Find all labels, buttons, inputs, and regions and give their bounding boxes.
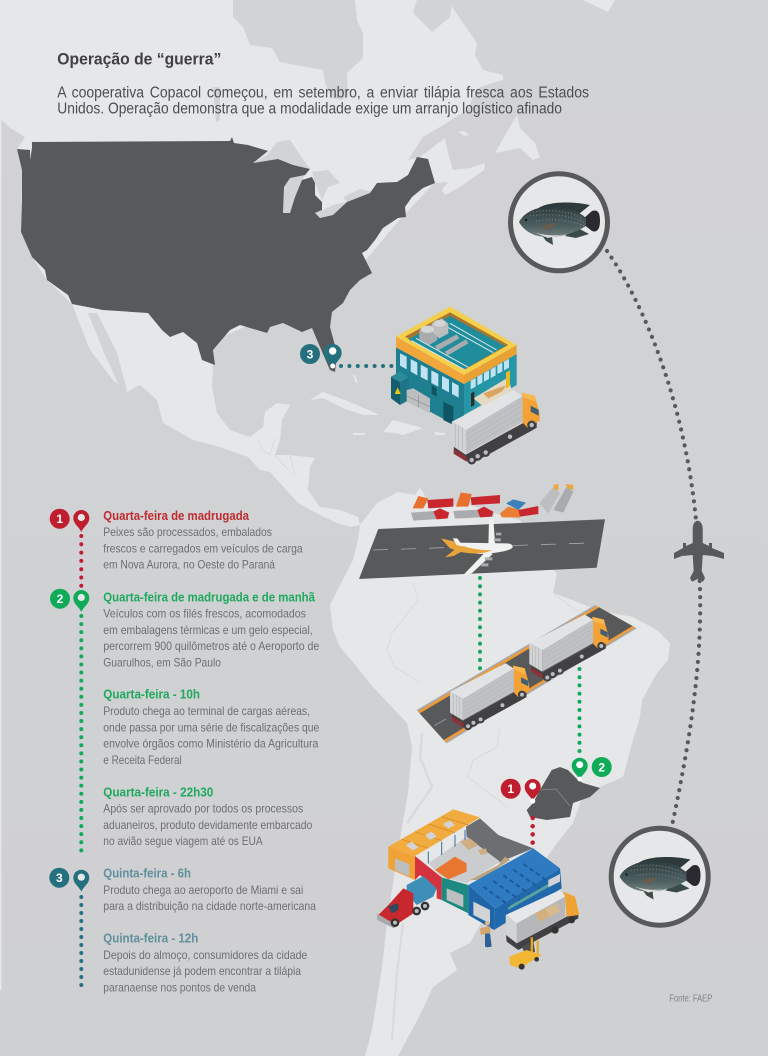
step: Quinta-feira 6h [103,866,316,913]
dotted flight path [607,251,700,822]
step: Quinta-feira 12h: estadunidense já podem encontrar a tilápia [103,964,301,978]
Newfoundland and islands [310,0,615,435]
intro text [57,84,589,117]
step: Quinta-feira 12h: Depois do almoço, consumidores da cidade [103,948,308,962]
timeline marker 2: 2 [57,592,64,606]
rivers and borders [258,438,590,1040]
step: Quinta-feira 12h: paranaense nos pontos de venda [103,980,256,994]
step: Quarta-feira 22h30: aduaneiros, produto devidamente embarcado [103,818,313,832]
timeline marker 3 [49,868,89,892]
marker 3 on the map [300,344,393,369]
source credit: Fonte: FAEP [669,994,713,1005]
red dotted route [530,818,535,843]
title: Operação de “guerra” [57,49,221,68]
step: Quinta-feira 12h [103,931,308,994]
step: Quarta-feira de madrugada: em Nova Aurora, no Oeste do Paraná [103,557,275,571]
step: Quarta-feira 22h30 [103,785,313,848]
step: Quarta-feira 22h30: no avião segue viagem até os EUA [103,834,263,848]
step: Quarta-feira 10h: Quarta-feira - 10h [103,687,200,702]
lakes and seas [88,0,452,392]
parked vehicles above runway [411,484,573,521]
step: Quarta-feira de madrugada e de manhã: em embalagens térmicas e um gelo especial, [103,623,313,637]
step: Quarta-feira 22h30: Após ser aprovado por todos os processos [103,802,303,816]
building with truck (Miami) [391,307,540,464]
step: Quarta-feira 22h30: Quarta-feira - 22h30 [103,785,213,800]
timeline dots red [79,536,83,587]
runway [359,519,605,579]
green dotted routes [480,578,580,751]
step: Quarta-feira 10h: Produto chega ao terminal de cargas aéreas, [103,704,310,718]
step: Quarta-feira de madrugada: Quarta-feira de madrugada [103,508,250,523]
step: Quinta-feira 12h: Quinta-feira - 12h [103,931,198,946]
warehouse with trucks and forklift [377,809,579,970]
step: Quarta-feira de madrugada [103,508,303,571]
step: Quarta-feira 10h: envolve órgãos como Ministério da Agricultura [103,737,319,751]
marker 2 on the map [572,757,612,781]
step: Quarta-feira de madrugada e de manhã [103,589,320,669]
timeline dots teal [79,897,83,993]
icon: tilapia bottom [611,828,708,925]
timeline marker 1 [50,509,89,532]
step: Quarta-feira 10h: onde passa por uma série de fiscalizações que [103,721,320,735]
step: Quarta-feira de madrugada e de manhã: Quarta-feira de madrugada e de manhã [103,589,316,604]
step: Quarta-feira 10h: e Receita Federal [103,753,182,767]
step: Quinta-feira 6h: para a distribuição na cidade norte-americana [103,899,316,913]
map: United States [17,137,435,372]
step: Quarta-feira de madrugada e de manhã: percorrem 900 quilômetros até o Aeroporto de [103,639,320,653]
step: Quinta-feira 6h: Quinta-feira - 6h [103,866,191,881]
step: Quarta-feira de madrugada: Peixes são processados, embalados [103,525,272,539]
marker 2 on the map: 2 [598,760,605,774]
timeline dots green [79,616,83,858]
worker carrying box [480,921,492,947]
forklift [509,937,542,970]
airplane on runway [441,519,513,575]
icon: tilapia top [510,174,608,271]
step: Quarta-feira de madrugada e de manhã: Veículos com os filés frescos, acomodados [103,606,306,620]
marker 3 on the map: 3 [307,348,314,362]
map: Paraná state [527,767,600,820]
step: Quarta-feira de madrugada e de manhã: Guarulhos, em São Paulo [103,655,221,669]
icon: plane silhouette [674,521,724,582]
marker 1 on the map [501,779,541,804]
step: Quarta-feira 10h [103,687,320,767]
timeline marker 2 [50,589,89,612]
intro text: A cooperativa Copacol começou, em setembro, a enviar tilápia fresca aos Estados [57,84,589,101]
step: Quarta-feira de madrugada: frescos e carregados em veículos de carga [103,541,303,555]
edge strip [0,118,2,990]
road with two trucks [417,605,637,743]
step: Quinta-feira 6h: Produto chega ao aeroporto de Miami e sai [103,883,303,897]
timeline marker 3: 3 [56,871,63,885]
timeline marker 1: 1 [56,512,63,526]
intro text: Unidos. Operação demonstra que a modalidade exige um arranjo logístico afinado [57,100,562,117]
marker 1 on the map: 1 [507,782,514,796]
